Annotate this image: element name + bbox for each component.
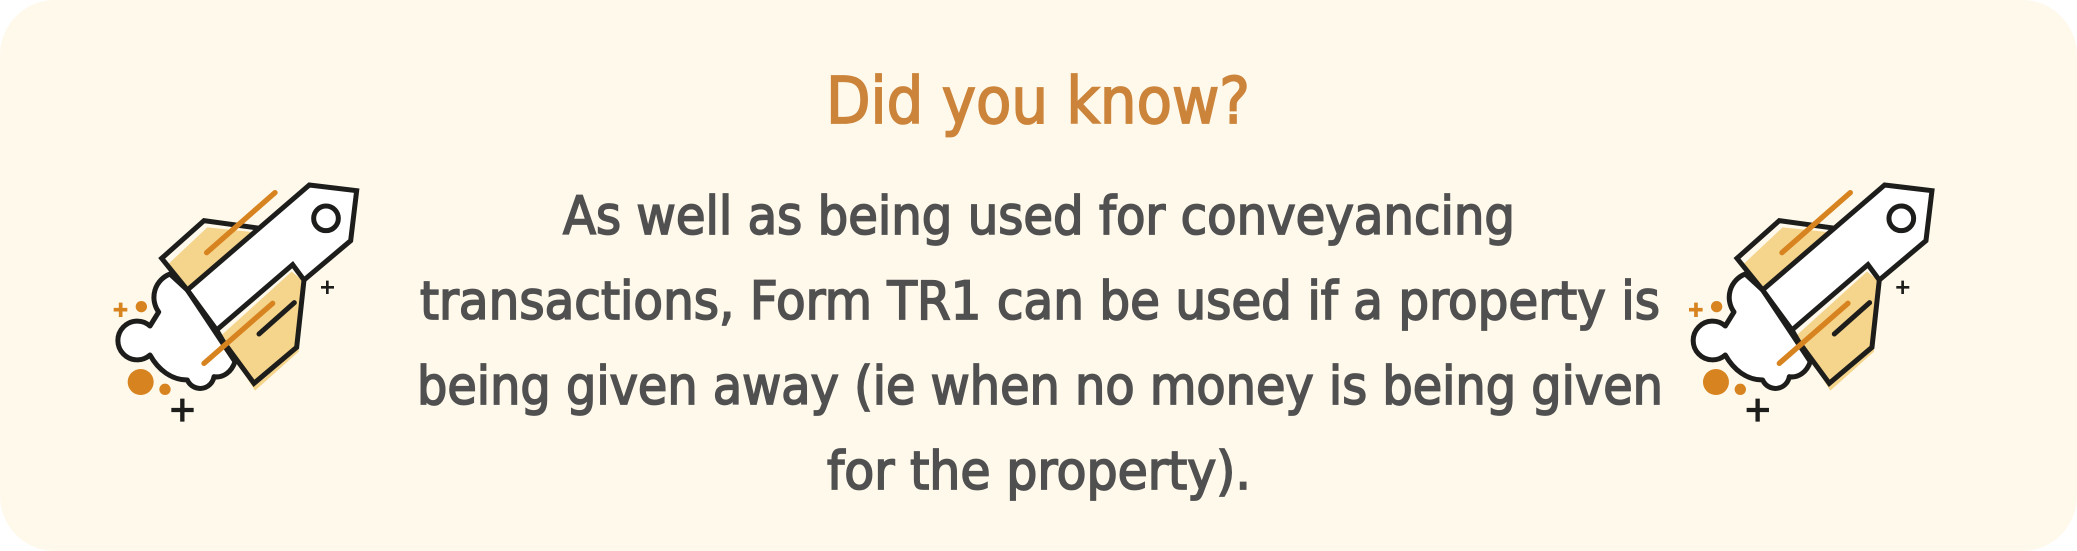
- text block: TR1 fact: for the property).: [827, 441, 1251, 502]
- text block: TR1 fact: As well as being used for conveyancing: [563, 186, 1515, 247]
- text block: TR1 fact: [417, 186, 1663, 502]
- icon: left rocket: [114, 185, 357, 422]
- text block: TR1 fact: transactions, Form TR1 can be used if a property is: [420, 271, 1660, 332]
- heading: did you know: Did you know?: [826, 65, 1250, 139]
- icon: right rocket: [1689, 185, 1932, 422]
- text block: TR1 fact: being given away (ie when no money is being given: [417, 356, 1663, 417]
